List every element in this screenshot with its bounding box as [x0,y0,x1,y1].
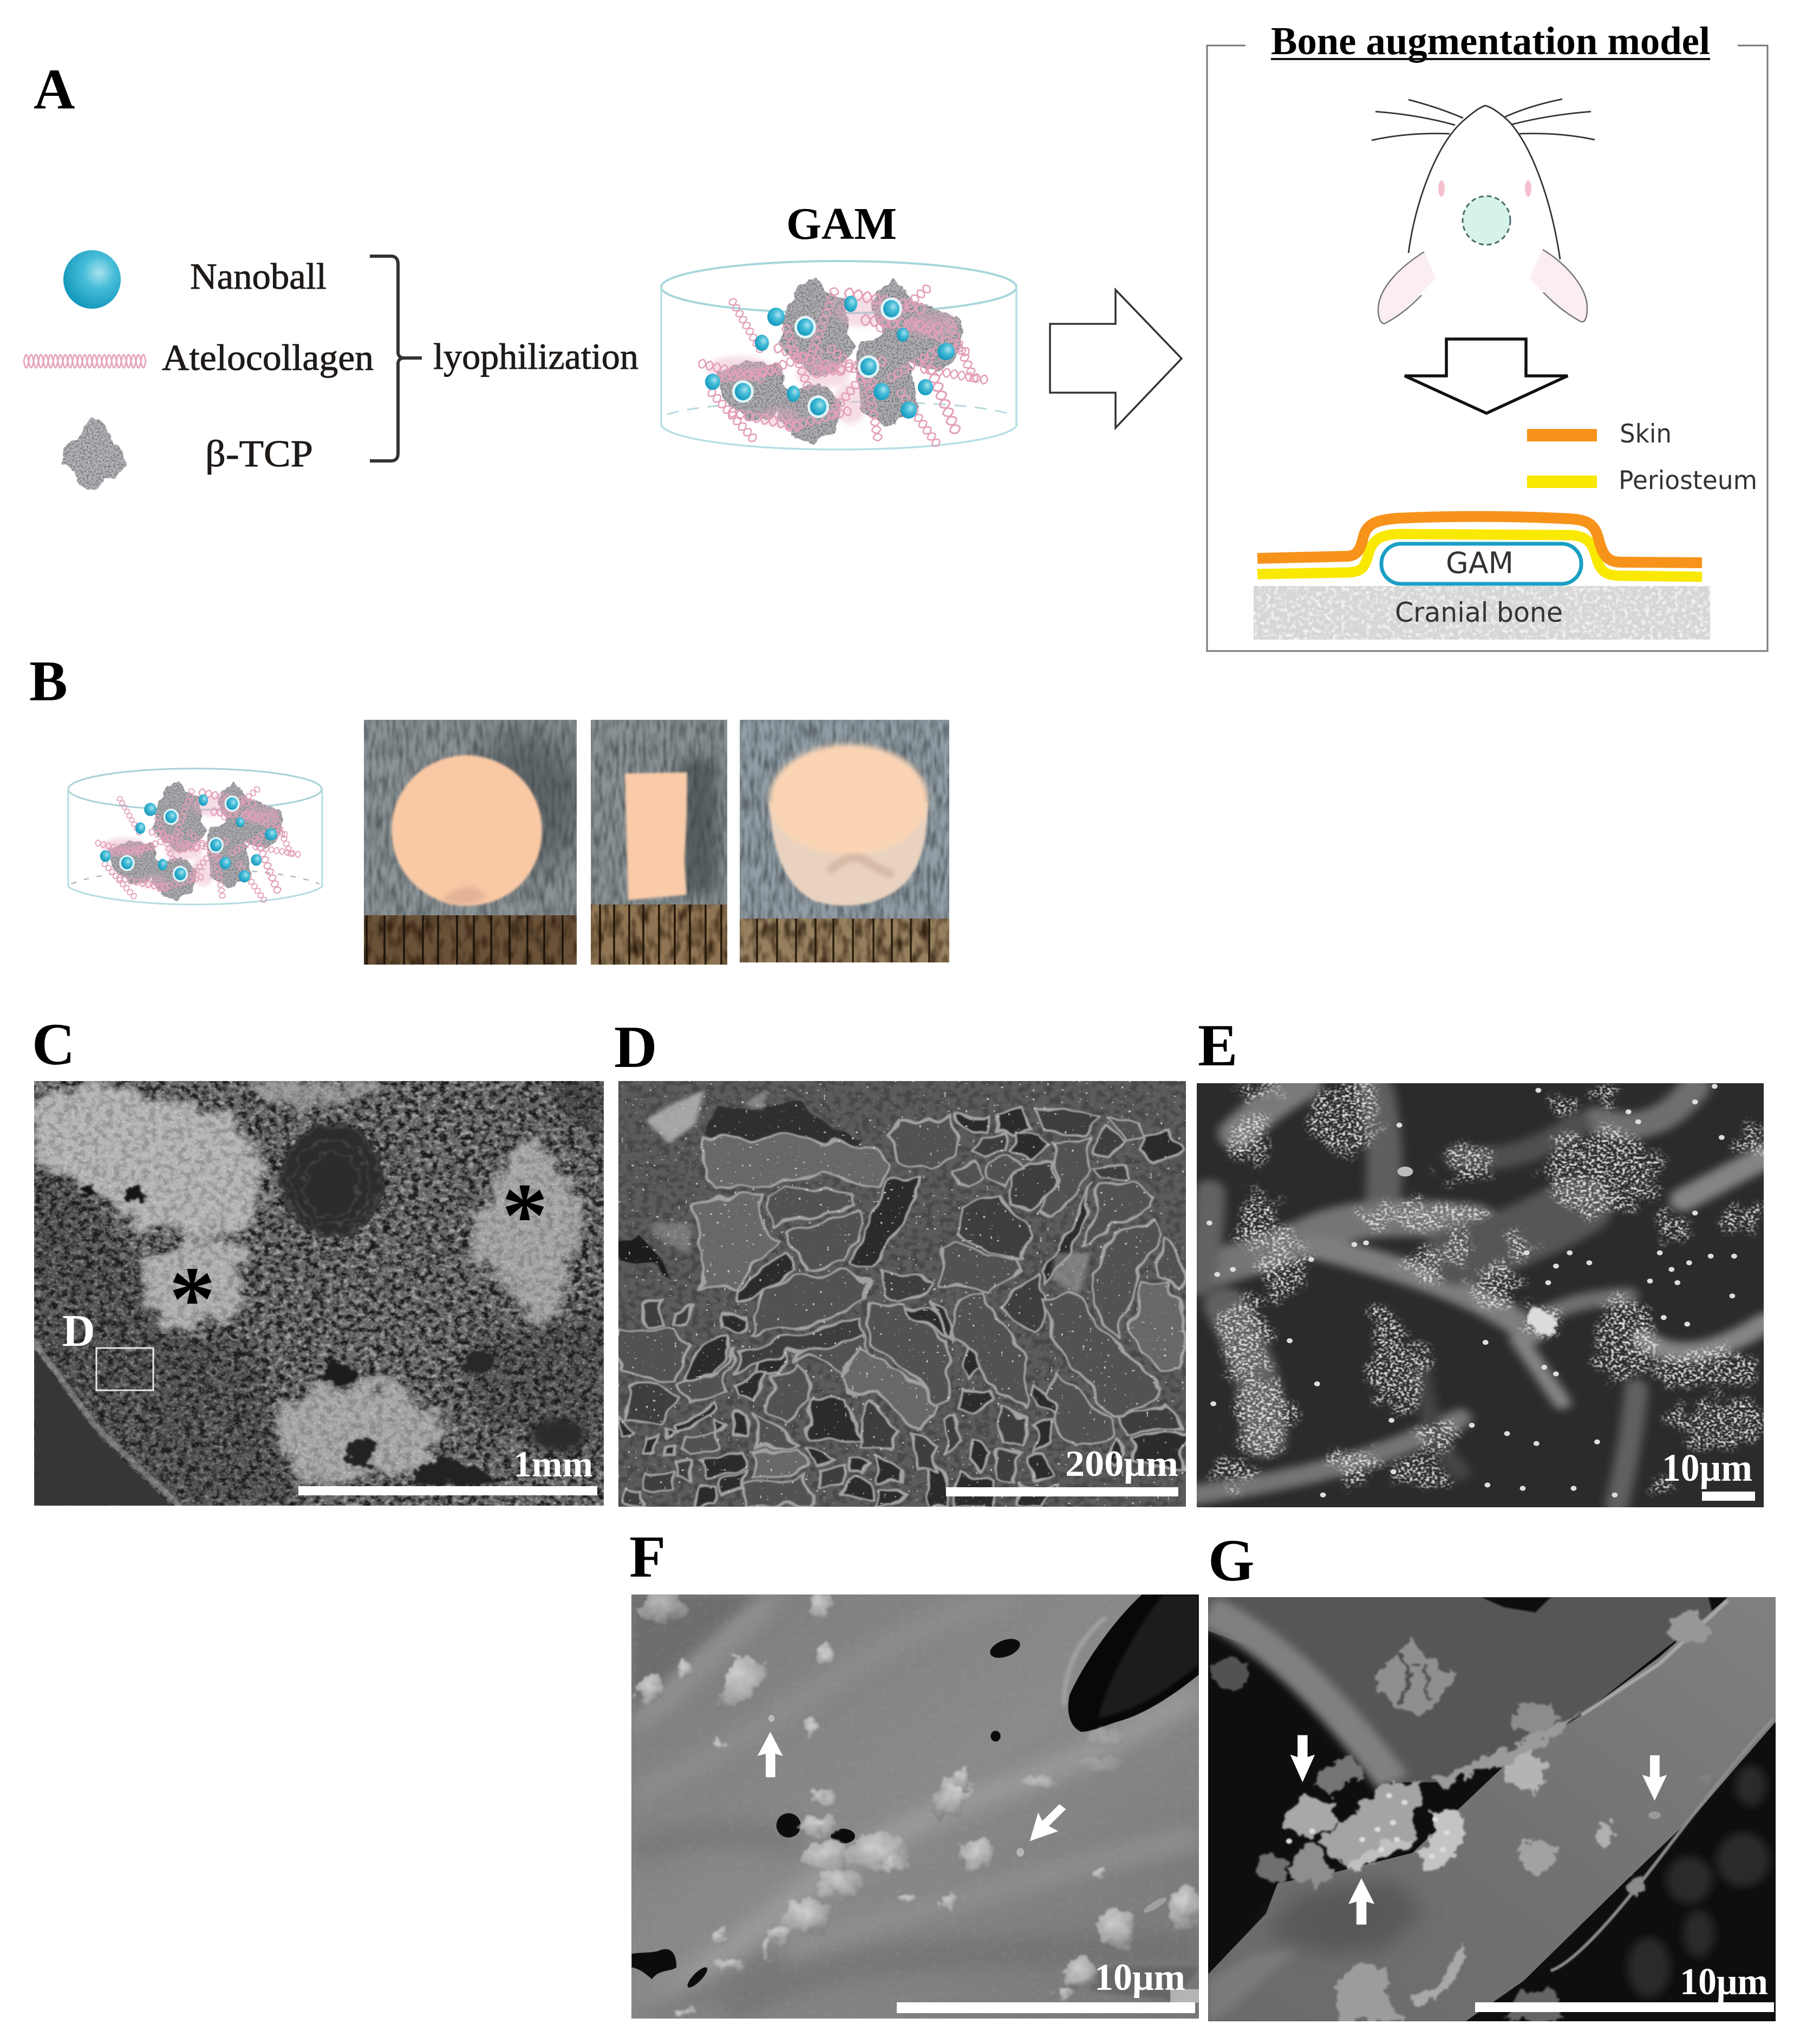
heading: Bone augmentation model [1271,19,1710,63]
panel label D: D [614,1014,657,1080]
SEM image C [31,1077,609,1512]
SEM image D [614,1077,1192,1512]
SEM image G [1204,1594,1782,2025]
panel label G: G [1208,1527,1255,1593]
label: beta-TCP: β-TCP [205,433,313,475]
icon: nanoball [63,250,121,309]
GAM cylinder [661,261,1016,450]
panel label C: C [32,1011,75,1077]
skin layer [1257,517,1702,563]
label: lyophilization: lyophilization [433,336,638,377]
inset rectangle [96,1348,153,1390]
asterisk right: * [501,1164,548,1266]
panel E: SEM with particle clusters [1194,1080,1770,1512]
arrow down left [1030,1804,1066,1841]
legend: periosteum: Periosteum [1619,466,1757,496]
label: GAM: GAM [1446,546,1514,580]
scale label G: 10μm [1680,1961,1768,2003]
scale bar G [1475,2002,1774,2012]
panel: bone augmentation model [1207,19,1768,651]
scale label F: 10μm [1094,1957,1185,1999]
scale label D: 200μm [1065,1443,1178,1484]
panel A: components and GAM scaffold [24,199,1182,490]
arrow down left [1290,1735,1315,1782]
cranial bone block [1254,586,1710,640]
scale bar E [1702,1492,1755,1501]
scale label E: 10μm [1662,1446,1752,1489]
arrow down right [1642,1755,1667,1801]
icon: atelocollagen helix [24,355,146,368]
panel G: high magnification SEM [1204,1594,1782,2025]
bone cross-section [1254,517,1710,640]
label: Atelocollagen: Atelocollagen [162,337,374,378]
photo: oblique view [740,720,949,965]
periosteum layer [1257,534,1702,577]
scale bar F [897,2002,1195,2013]
scaffold body [769,802,928,906]
panel B: GAM schematic and photographs [68,720,949,965]
label: cranial bone: Cranial bone [1395,597,1563,628]
panel label B: B [29,649,68,713]
panel label A: A [34,57,75,121]
scaffold disc [392,755,542,906]
ruler [740,919,949,965]
arrow up [1348,1878,1374,1925]
panel D: SEM cell network [614,1077,1192,1512]
label: Nanoball: Nanoball [190,256,327,297]
arrow up [758,1732,783,1777]
title: GAM: GAM [786,199,897,249]
bracket [370,256,422,461]
region label D: D [62,1306,95,1356]
GAM implant [1381,544,1581,584]
heading underline [1271,58,1710,60]
scale bar D [946,1487,1178,1496]
panel label F: F [629,1524,666,1590]
scaffold edge [625,772,687,900]
panel label E: E [1198,1012,1237,1078]
frame [1207,45,1768,651]
scaffold top face [769,744,928,855]
ruler [364,915,577,965]
scale label C: 1mm [513,1443,593,1485]
photo: side view [591,720,727,965]
legend: skin: Skin [1620,419,1672,449]
icon: beta-TCP particle [65,420,126,490]
arrow: to bone model [1050,290,1182,428]
arrow: down [1405,339,1568,413]
icon: mouse head [1372,99,1595,324]
ruler [591,904,727,965]
GAM mixture [697,281,988,448]
legend: periosteum swatch [1527,476,1597,488]
SEM image F [627,1591,1204,2025]
asterisk left: * [169,1248,216,1350]
scale bar C [298,1486,597,1495]
panel F: high magnification SEM [627,1591,1204,2025]
SEM image E [1194,1080,1770,1512]
panel C: low magnification SEM [31,1077,609,1512]
schematic cylinder [68,769,322,904]
legend: skin swatch [1527,429,1597,441]
photo: top view [364,720,585,965]
